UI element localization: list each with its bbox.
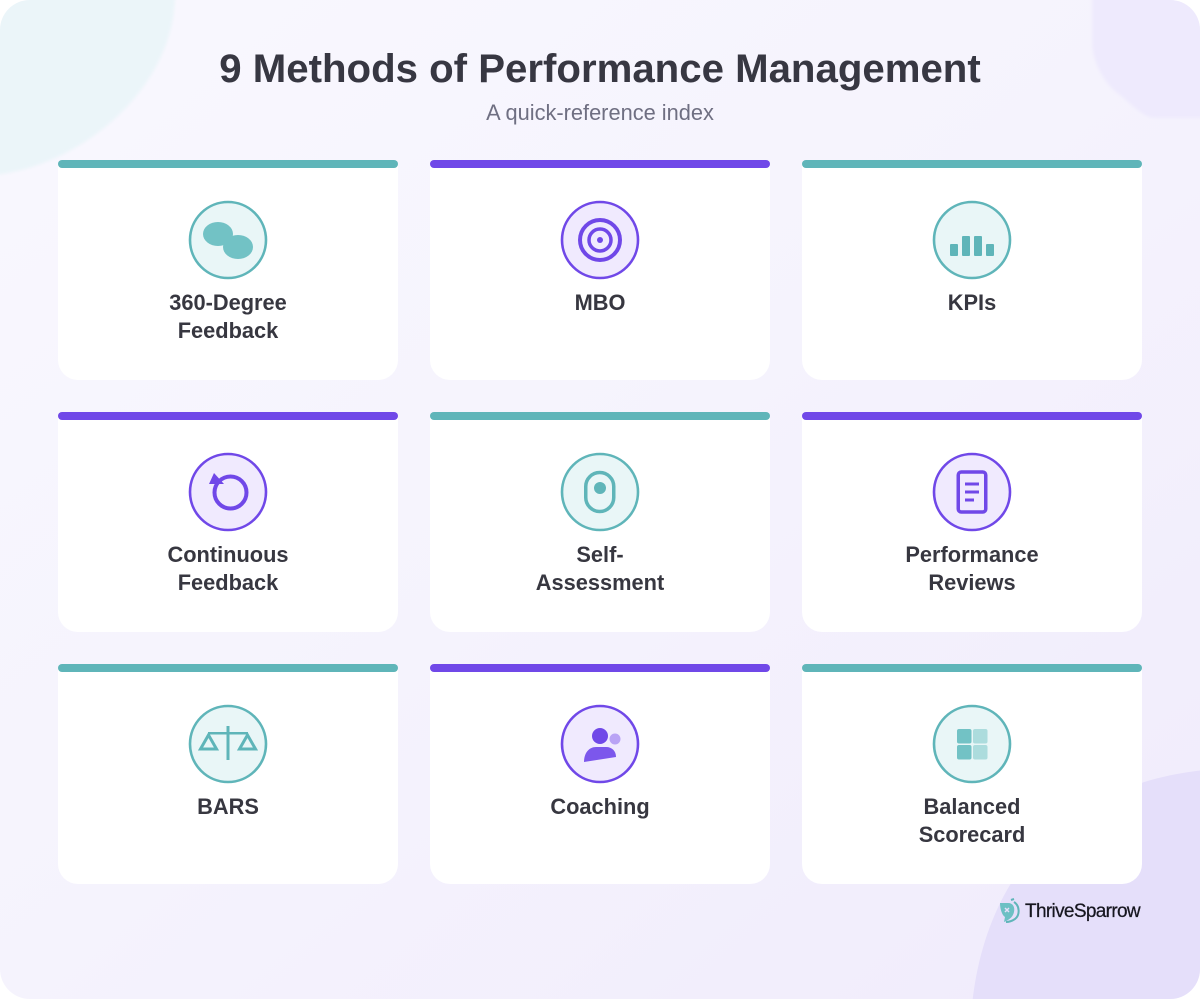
wordmark: ThriveSparrow <box>1025 901 1140 922</box>
card: Continuous Feedback <box>58 412 398 632</box>
icon: four-square grid <box>932 704 1012 784</box>
label: MBO <box>575 290 625 315</box>
icon: capsule with dot <box>560 452 640 532</box>
icon: balance scale <box>188 704 268 784</box>
label: Self- <box>576 542 624 567</box>
label <box>169 290 287 343</box>
label <box>167 542 289 595</box>
icon: target <box>560 200 640 280</box>
card: Performance Reviews <box>802 412 1142 632</box>
subtitle: A quick-reference index <box>486 100 714 125</box>
icon: sparrow logo mark <box>1000 898 1020 923</box>
label: Feedback <box>178 570 278 595</box>
icon: bar chart <box>932 200 1012 280</box>
label <box>919 794 1025 847</box>
title: 9 Methods of Performance Management <box>219 46 981 91</box>
icon: circular arrow <box>188 452 268 532</box>
label: KPIs <box>948 290 996 315</box>
label: 360-Degree <box>169 290 287 315</box>
card: Balanced Scorecard <box>802 664 1142 884</box>
label: Continuous <box>167 542 289 567</box>
label: Reviews <box>928 570 1016 595</box>
label: Performance <box>905 542 1039 567</box>
card: 360-Degree Feedback <box>58 160 398 380</box>
icon: coach and learner <box>560 704 640 784</box>
card: MBO <box>430 160 770 380</box>
card: Self-Assessment <box>430 412 770 632</box>
label: Assessment <box>536 570 664 595</box>
label: Coaching <box>550 794 650 819</box>
label <box>536 542 664 595</box>
label <box>905 542 1039 595</box>
icon: overlapping speech ovals <box>188 200 268 280</box>
card: BARS <box>58 664 398 884</box>
card: Coaching <box>430 664 770 884</box>
icon: document <box>932 452 1012 532</box>
label: Scorecard <box>919 822 1025 847</box>
label: Feedback <box>178 318 278 343</box>
card: KPIs <box>802 160 1142 380</box>
label: BARS <box>197 794 259 819</box>
label: Balanced <box>924 794 1020 819</box>
logo: ThriveSparrow <box>1000 898 1141 923</box>
